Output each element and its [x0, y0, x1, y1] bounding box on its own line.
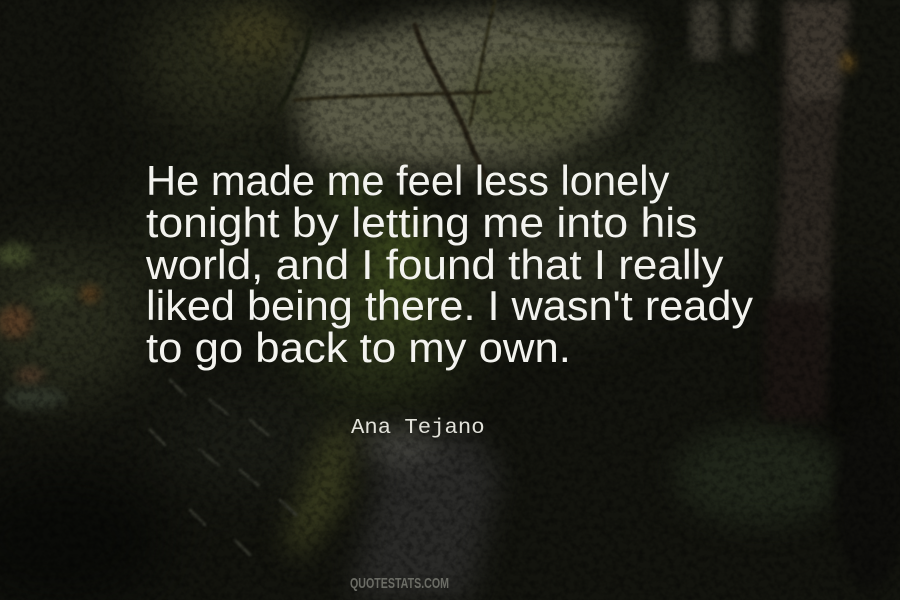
quote text: liked being there. I wasn't ready: [146, 282, 753, 329]
watermark: QUOTESTATS.COM: [350, 575, 449, 592]
quote text: He made me feel less lonely: [146, 157, 669, 204]
quote text: world, and I found that I really: [146, 240, 723, 288]
quote text: to go back to my own.: [146, 324, 571, 371]
quote text: tonight by letting me into his: [146, 199, 697, 246]
author name: Ana Tejano: [351, 417, 485, 440]
quote text: [146, 157, 753, 371]
